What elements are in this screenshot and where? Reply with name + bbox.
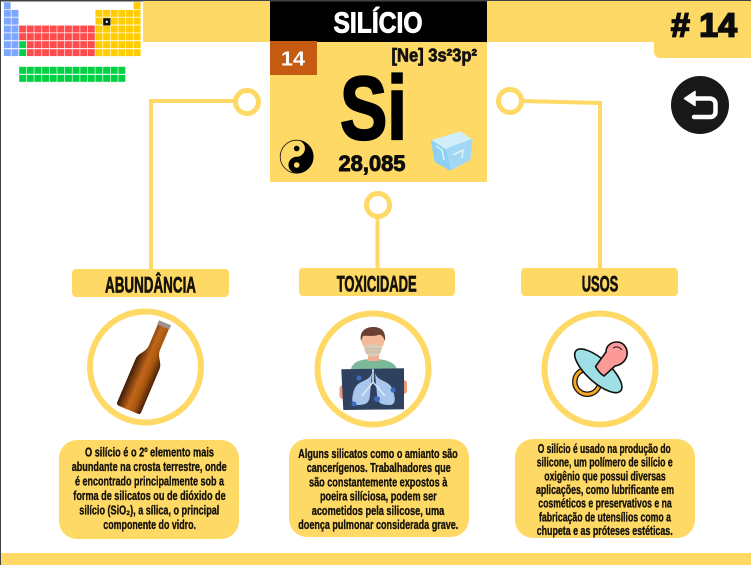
text box <box>515 439 695 538</box>
body text: oxigênio que possui diversas <box>544 469 666 483</box>
heading: TOXICIDADE <box>337 272 417 297</box>
element symbol: Si <box>340 59 407 159</box>
electron configuration: [Ne] 3s²3p² <box>392 46 477 66</box>
icon: yin yang <box>280 140 313 173</box>
connector center <box>366 194 390 268</box>
body text: fabricação de utensílios como a <box>539 510 672 524</box>
element number tab <box>654 6 751 58</box>
icon: ice cube <box>432 132 472 170</box>
icon: brown bottle <box>116 318 177 415</box>
image ring <box>544 314 656 424</box>
top band right <box>487 1 751 42</box>
connector left <box>151 90 258 270</box>
title: SILÍCIO <box>334 6 422 40</box>
back button <box>671 76 729 134</box>
heading box <box>521 268 678 296</box>
panel: toxicidade <box>289 268 469 537</box>
periodic table locator <box>4 6 141 78</box>
body text: aplicações, como lubrificante em <box>536 483 674 497</box>
body text: acometidos pela silicose, uma <box>312 504 445 518</box>
body text: chupeta e as próteses estéticas. <box>537 524 673 538</box>
body text <box>536 442 674 538</box>
image ring <box>90 312 201 422</box>
body text: poeira silíciosa, podem ser <box>320 490 437 504</box>
connector right <box>498 90 600 268</box>
body text: componente do vidro. <box>103 518 196 532</box>
body text: são constantemente expostos à <box>309 476 447 490</box>
atomic number: 14 <box>281 48 306 70</box>
body text: O silício é usado na produção do <box>538 442 671 456</box>
panel: abundancia <box>59 269 239 539</box>
element number: # 14 <box>671 6 738 44</box>
body text: doença pulmonar considerada grave. <box>298 518 458 532</box>
atomic mass: 28,085 <box>338 151 406 176</box>
body text: forma de silicatos ou de dióxido de <box>73 489 226 503</box>
element card <box>270 2 487 182</box>
heading box <box>72 269 229 297</box>
body text <box>298 447 458 532</box>
panel: usos <box>515 268 695 538</box>
body text: Alguns silicatos como o amianto são <box>298 447 458 461</box>
heading: ABUNDÂNCIA <box>105 273 196 298</box>
heading: USOS <box>582 272 618 297</box>
body text: é encontrado principalmente sob a <box>75 474 225 488</box>
body text: abundante na crosta terrestre, onde <box>72 460 227 474</box>
body text: silício (SiO₂), a sílica, o principal <box>79 504 219 518</box>
top band left <box>143 1 270 42</box>
image ring <box>318 314 428 424</box>
body text <box>72 446 227 532</box>
icon: person with lung x-ray <box>340 327 407 410</box>
title bar <box>270 2 487 42</box>
body text: silicone, um polímero de silício e <box>537 456 673 470</box>
body text: cancerígenos. Trabalhadores que <box>307 461 451 475</box>
atomic number box <box>270 41 317 75</box>
body text: O silício é o 2º elemento mais <box>85 446 214 460</box>
text box <box>59 440 239 539</box>
icon: pacifier <box>568 342 628 399</box>
heading box <box>299 268 455 296</box>
body text: cosméticos e preservativos e na <box>538 497 672 511</box>
bottom band <box>1 553 751 565</box>
text box <box>289 439 469 537</box>
